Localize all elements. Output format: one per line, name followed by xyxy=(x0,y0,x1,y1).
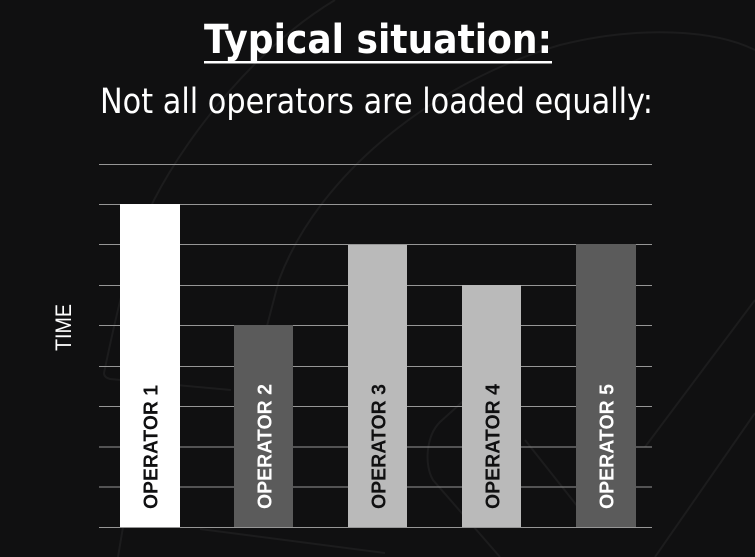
title: Typical situation: xyxy=(204,17,552,63)
y axis label: time: TIME xyxy=(51,304,76,351)
bar: operator 3: OPERATOR 3 xyxy=(368,384,390,509)
bar: operator 2 xyxy=(234,325,293,527)
bar: operator 2: OPERATOR 2 xyxy=(254,384,276,509)
bar: operator 1 xyxy=(120,204,180,527)
bar: operator 4: OPERATOR 4 xyxy=(482,383,504,509)
subtitle: Not all operators are loaded equally: xyxy=(100,82,653,122)
bar: operator 1: OPERATOR 1 xyxy=(140,385,162,509)
bar: operator 5 xyxy=(576,244,636,527)
bar: operator 4 xyxy=(462,285,521,527)
bar chart xyxy=(120,204,636,527)
bar: operator 3 xyxy=(348,245,407,527)
bar: operator 5: OPERATOR 5 xyxy=(596,384,618,509)
